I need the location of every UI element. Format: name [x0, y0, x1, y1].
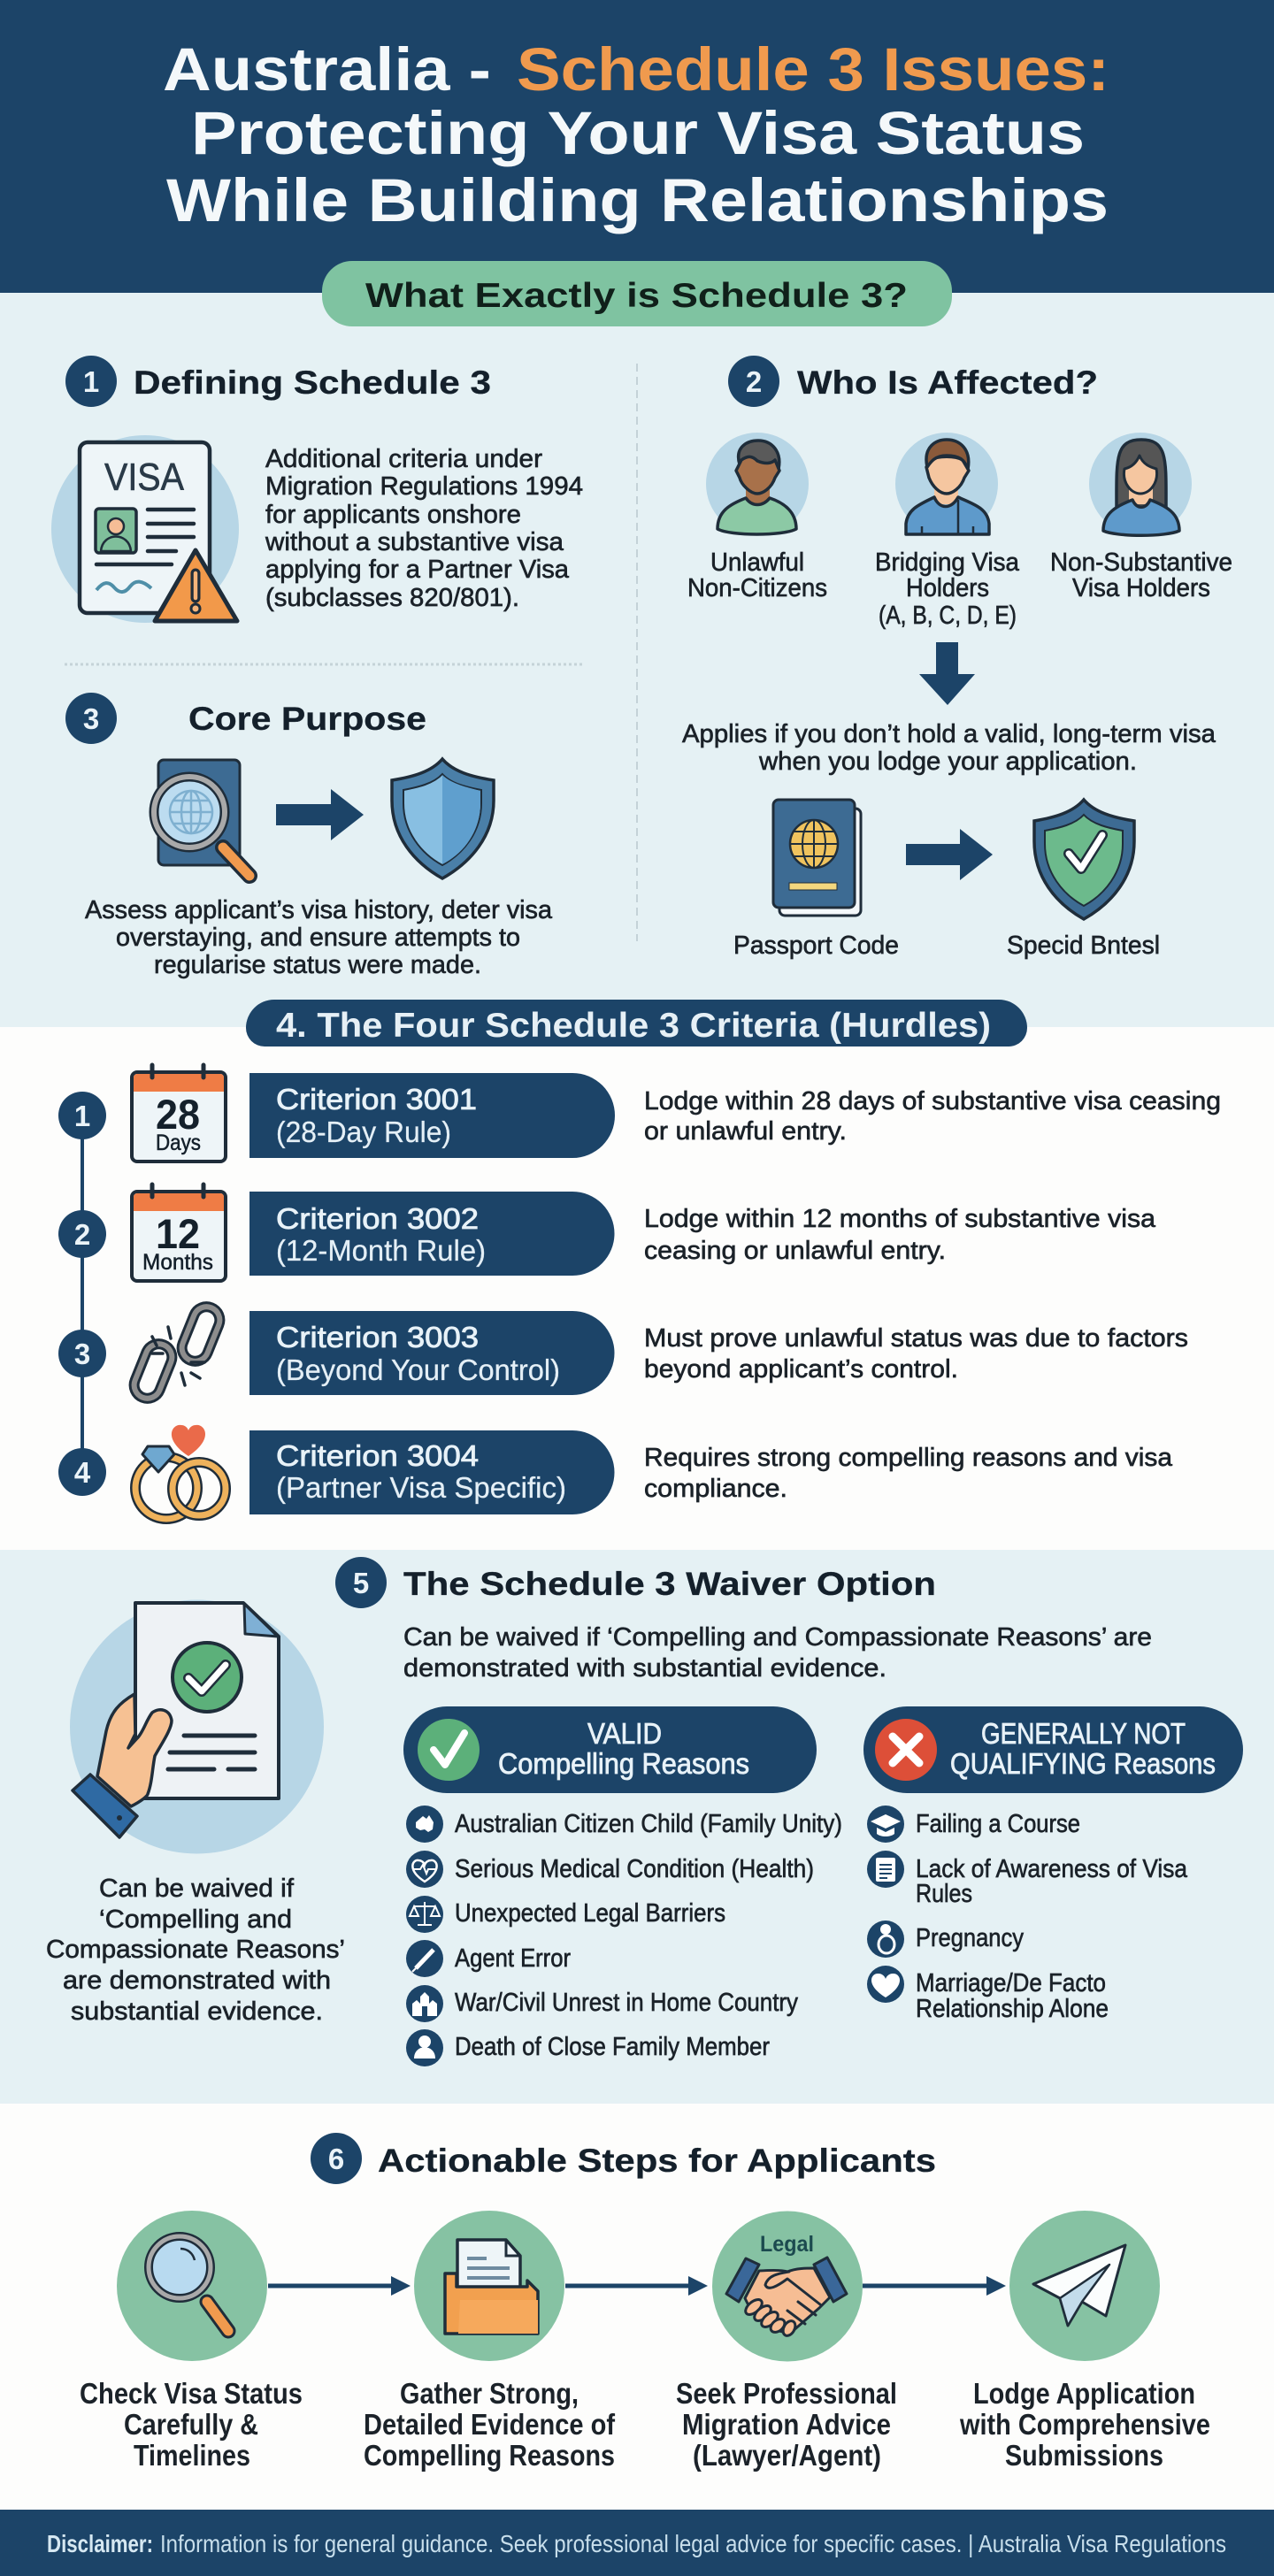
text: schedule 3 definition: for applicants onshore	[265, 501, 521, 529]
label: unlawful non-citizens	[687, 548, 827, 602]
step 3: seek advice	[676, 2212, 897, 2472]
step 3: seek advice: (Lawyer/Agent)	[693, 2439, 881, 2472]
label: non-substantive visa holders: Non-Substantive	[1050, 548, 1232, 577]
text: waiver callout: Can be waived if	[99, 1874, 295, 1903]
bar: criterion 3002	[249, 1192, 614, 1276]
step 4: lodge application: with Comprehensive	[959, 2408, 1210, 2441]
heading: waiver option: 5	[353, 1567, 369, 1599]
step 1: check visa status: Timelines	[134, 2439, 250, 2472]
item: marriage or de facto relationship: Marriage/De Facto	[916, 1969, 1106, 1997]
item: agent error	[406, 1940, 571, 1977]
bar: criterion 3004	[249, 1430, 614, 1514]
heading: defining schedule 3: Defining Schedule 3	[134, 364, 491, 401]
footer disclaimer	[0, 2510, 1274, 2576]
text: applies if: Applies if you don’t hold a valid, long-term visa	[682, 720, 1216, 748]
heading: core purpose: Core Purpose	[188, 701, 426, 737]
item: unexpected legal barriers: Unexpected Legal Barriers	[455, 1899, 725, 1928]
item: lack of awareness: Lack of Awareness of Visa	[916, 1855, 1188, 1883]
panel: waiver option	[46, 1557, 1243, 2066]
icon: passport	[773, 800, 861, 916]
arrow: step 1 to step 2	[268, 2276, 411, 2296]
item: death of close family member: Death of Close Family Member	[455, 2033, 770, 2061]
text: criterion 3001 description: or unlawful entry.	[644, 1117, 847, 1146]
footer disclaimer: Disclaimer:	[47, 2530, 153, 2557]
bar: criterion 3001: (28-Day Rule)	[276, 1116, 451, 1148]
step 2: gather evidence: Gather Strong,	[400, 2377, 579, 2410]
title: Protecting Your Visa Status	[191, 99, 1085, 167]
item: lack of awareness	[867, 1851, 1188, 1908]
heading: actionable steps: Actionable Steps for Applicants	[378, 2143, 936, 2179]
label: bridging visa holders: Holders	[906, 574, 989, 602]
text: waiver callout: substantial evidence.	[71, 1997, 323, 2026]
text: core purpose description: Assess applicant’s visa history, deter visa	[85, 896, 553, 924]
text: criterion 3001 description: Lodge within 28 days of substantive visa ceasing	[644, 1087, 1221, 1116]
icon: visa document with warning	[51, 435, 239, 623]
bar: criterion 3001	[249, 1073, 615, 1158]
item: war or civil unrest	[406, 1985, 798, 2022]
bar: criterion 3003: Criterion 3003	[276, 1321, 479, 1353]
text: applies if: when you lodge your application.	[758, 748, 1137, 776]
text: core purpose description: overstaying, and ensure attempts to	[116, 924, 520, 952]
row: criterion 3003: 3	[74, 1338, 90, 1370]
text: criterion 3002 description: Lodge within 12 months of substantive visa	[644, 1205, 1156, 1233]
icon: visa document with warning: VISA	[104, 456, 185, 499]
title: Schedule 3 Issues:	[517, 35, 1109, 104]
icon: magnifier over passport	[154, 760, 249, 876]
title: Australia -	[163, 35, 510, 104]
icon: magnifying glass	[149, 2236, 228, 2331]
bar: criterion 3002: Criterion 3002	[276, 1202, 479, 1235]
pill: generally not qualifying reasons: GENERALLY NOT	[981, 1717, 1186, 1750]
item: pregnancy	[867, 1920, 1024, 1958]
icon: calendar 12 months: Months	[142, 1250, 213, 1275]
icon: calendar 28 days: 28	[156, 1091, 200, 1138]
pill: valid compelling reasons	[403, 1706, 817, 1793]
icon: calendar 28 days	[132, 1065, 226, 1162]
item: failing a course: Failing a Course	[916, 1810, 1080, 1838]
subtitle pill	[322, 261, 952, 326]
icon: handshake	[726, 2258, 847, 2338]
icon: broken chain	[130, 1303, 224, 1402]
text: schedule 3 definition: without a substantive visa	[265, 528, 564, 556]
item: serious medical condition	[406, 1851, 814, 1888]
item: australian citizen child: Australian Citizen Child (Family Unity)	[455, 1810, 842, 1838]
label: non-substantive visa holders: Visa Holders	[1072, 574, 1210, 602]
icon: non-substantive visa holder person	[1089, 433, 1192, 535]
text: criterion 3004 description: Requires strong compelling reasons and visa	[644, 1444, 1173, 1472]
heading: core purpose: 3	[83, 702, 99, 735]
icon: calendar 28 days: Days	[156, 1131, 201, 1155]
text: waiver callout: ‘Compelling and	[99, 1905, 292, 1934]
subtitle pill: What Exactly is Schedule 3?	[365, 277, 908, 315]
pill: valid compelling reasons: Compelling Reasons	[498, 1747, 749, 1780]
arrow: step 3 to step 4	[863, 2276, 1006, 2296]
item: marriage or de facto relationship	[867, 1966, 1109, 2023]
heading pill: four criteria: 4. The Four Schedule 3 Criteria (Hurdles)	[276, 1007, 991, 1045]
label: unlawful non-citizens: Unlawful	[710, 548, 804, 577]
step 3: seek advice: Legal	[760, 2232, 814, 2257]
panel: who is affected	[682, 356, 1232, 960]
bar: criterion 3003: (Beyond Your Control)	[276, 1353, 560, 1386]
item: pregnancy: Pregnancy	[916, 1924, 1024, 1952]
arrow: down	[919, 642, 975, 705]
text: criterion 3003 description: Must prove unlawful status was due to factors	[644, 1324, 1188, 1353]
panel: actionable steps	[80, 2133, 1210, 2472]
label: specid bntesl: Specid Bntesl	[1007, 932, 1160, 960]
icon: paper plane	[1033, 2245, 1125, 2326]
heading: core purpose	[65, 693, 426, 744]
label: bridging visa holders: (A, B, C, D, E)	[879, 602, 1017, 630]
step 1: check visa status	[80, 2211, 303, 2472]
text: schedule 3 definition: Migration Regulations 1994	[265, 472, 583, 501]
title: While Building Relationships	[166, 166, 1109, 234]
panel: defining schedule 3	[51, 356, 583, 623]
icon: folder with document	[445, 2240, 538, 2334]
text: criterion 3003 description: beyond applicant’s control.	[644, 1355, 958, 1384]
text: criterion 3002 description: ceasing or unlawful entry.	[644, 1237, 946, 1265]
item: agent error: Agent Error	[455, 1944, 571, 1973]
arrow: passport to shield	[906, 829, 993, 880]
icon: hand holding approved document	[70, 1599, 324, 1854]
pill: generally not qualifying reasons: QUALIFYING Reasons	[950, 1747, 1216, 1780]
item: death of close family member	[406, 2029, 770, 2066]
row: criterion 3002	[58, 1184, 1156, 1281]
heading pill: four criteria	[246, 1000, 1027, 1046]
text: core purpose description	[85, 896, 553, 979]
panel: header	[0, 0, 1274, 293]
text: core purpose description: regularise status were made.	[154, 951, 481, 979]
icon: green shield with check	[1034, 800, 1134, 919]
text: criterion 3001 description	[644, 1087, 1221, 1146]
label: unlawful non-citizens: Non-Citizens	[687, 574, 827, 602]
text: waiver callout: Compassionate Reasons’	[46, 1936, 345, 1964]
step 1: check visa status: Check Visa Status	[80, 2377, 303, 2410]
bar: criterion 3004: (Partner Visa Specific)	[276, 1471, 566, 1504]
row: criterion 3001	[58, 1065, 1221, 1162]
panel: four criteria	[58, 1000, 1221, 1519]
row: criterion 3004: 4	[74, 1456, 91, 1489]
item: lack of awareness: Rules	[916, 1880, 972, 1908]
bar: criterion 3001: Criterion 3001	[276, 1083, 477, 1116]
heading: who is affected	[728, 356, 1098, 407]
row: criterion 3002: 2	[74, 1218, 90, 1251]
text: waiver intro: Can be waived if ‘Compelling and Compassionate Reasons’ are	[403, 1623, 1152, 1652]
icon: calendar 12 months	[132, 1184, 226, 1281]
arrow: step 2 to step 3	[565, 2276, 708, 2296]
text: waiver intro: demonstrated with substantial evidence.	[403, 1654, 886, 1683]
text: criterion 3004 description	[644, 1444, 1173, 1503]
item: failing a course	[867, 1806, 1080, 1843]
text: criterion 3004 description: compliance.	[644, 1475, 787, 1503]
label: passport code: Passport Code	[733, 932, 899, 960]
heading: who is affected: 2	[746, 365, 762, 398]
pill: valid compelling reasons: VALID	[587, 1717, 662, 1750]
list: not qualifying reasons	[867, 1806, 1188, 2023]
bar: criterion 3002: (12-Month Rule)	[276, 1234, 486, 1267]
text: schedule 3 definition	[265, 445, 583, 612]
step 2: gather evidence	[364, 2211, 616, 2472]
text: schedule 3 definition: applying for a Partner Visa	[265, 556, 570, 584]
text: schedule 3 definition: Additional criteria under	[265, 445, 542, 473]
label: bridging visa holders	[875, 548, 1020, 630]
step 3: seek advice: Seek Professional	[676, 2377, 897, 2410]
text: waiver callout	[46, 1874, 345, 2026]
row: criterion 3004	[58, 1425, 1173, 1519]
item: australian citizen child	[406, 1806, 842, 1843]
heading: actionable steps	[311, 2133, 936, 2184]
heading: waiver option	[335, 1557, 936, 1608]
heading: defining schedule 3	[65, 356, 491, 407]
heading: defining schedule 3: 1	[83, 365, 99, 398]
icon: blue shield	[392, 759, 494, 878]
icon: wedding rings	[135, 1425, 226, 1519]
text: criterion 3002 description	[644, 1205, 1156, 1265]
item: unexpected legal barriers	[406, 1896, 725, 1933]
step 3: seek advice: Migration Advice	[682, 2408, 891, 2441]
step 2: gather evidence: Compelling Reasons	[364, 2439, 615, 2472]
step 4: lodge application: Lodge Application	[973, 2377, 1195, 2410]
label: non-substantive visa holders	[1050, 548, 1232, 602]
bar: criterion 3003	[249, 1311, 614, 1395]
text: waiver intro	[403, 1623, 1152, 1683]
step 1: check visa status: Carefully &	[124, 2408, 258, 2441]
item: serious medical condition: Serious Medical Condition (Health)	[455, 1855, 814, 1883]
panel: core purpose	[65, 693, 553, 979]
step 2: gather evidence: Detailed Evidence of	[364, 2408, 616, 2441]
text: waiver callout: are demonstrated with	[63, 1966, 331, 1995]
icon: bridging visa holder person	[895, 433, 998, 535]
label: bridging visa holders: Bridging Visa	[875, 548, 1020, 577]
bar: criterion 3004: Criterion 3004	[276, 1439, 479, 1472]
text: criterion 3003 description	[644, 1324, 1188, 1384]
step 4: lodge application: Submissions	[1005, 2439, 1163, 2472]
arrow: magnifier to shield	[276, 789, 364, 840]
step 4: lodge application	[959, 2211, 1210, 2472]
heading: actionable steps: 6	[328, 2143, 344, 2175]
list: valid reasons	[406, 1806, 842, 2066]
row: criterion 3001: 1	[74, 1100, 90, 1132]
pill: generally not qualifying reasons	[863, 1706, 1243, 1793]
text: applies if	[682, 720, 1216, 776]
heading: waiver option: The Schedule 3 Waiver Option	[403, 1566, 936, 1602]
title	[163, 35, 1109, 234]
item: war or civil unrest: War/Civil Unrest in Home Country	[455, 1989, 798, 2017]
item: marriage or de facto relationship: Relationship Alone	[916, 1995, 1109, 2023]
icon: calendar 12 months: 12	[156, 1210, 200, 1257]
icon: unlawful non-citizen person	[706, 433, 809, 535]
heading: who is affected: Who Is Affected?	[797, 364, 1098, 401]
row: criterion 3003	[58, 1303, 1188, 1402]
text: schedule 3 definition: (subclasses 820/801).	[265, 584, 519, 612]
